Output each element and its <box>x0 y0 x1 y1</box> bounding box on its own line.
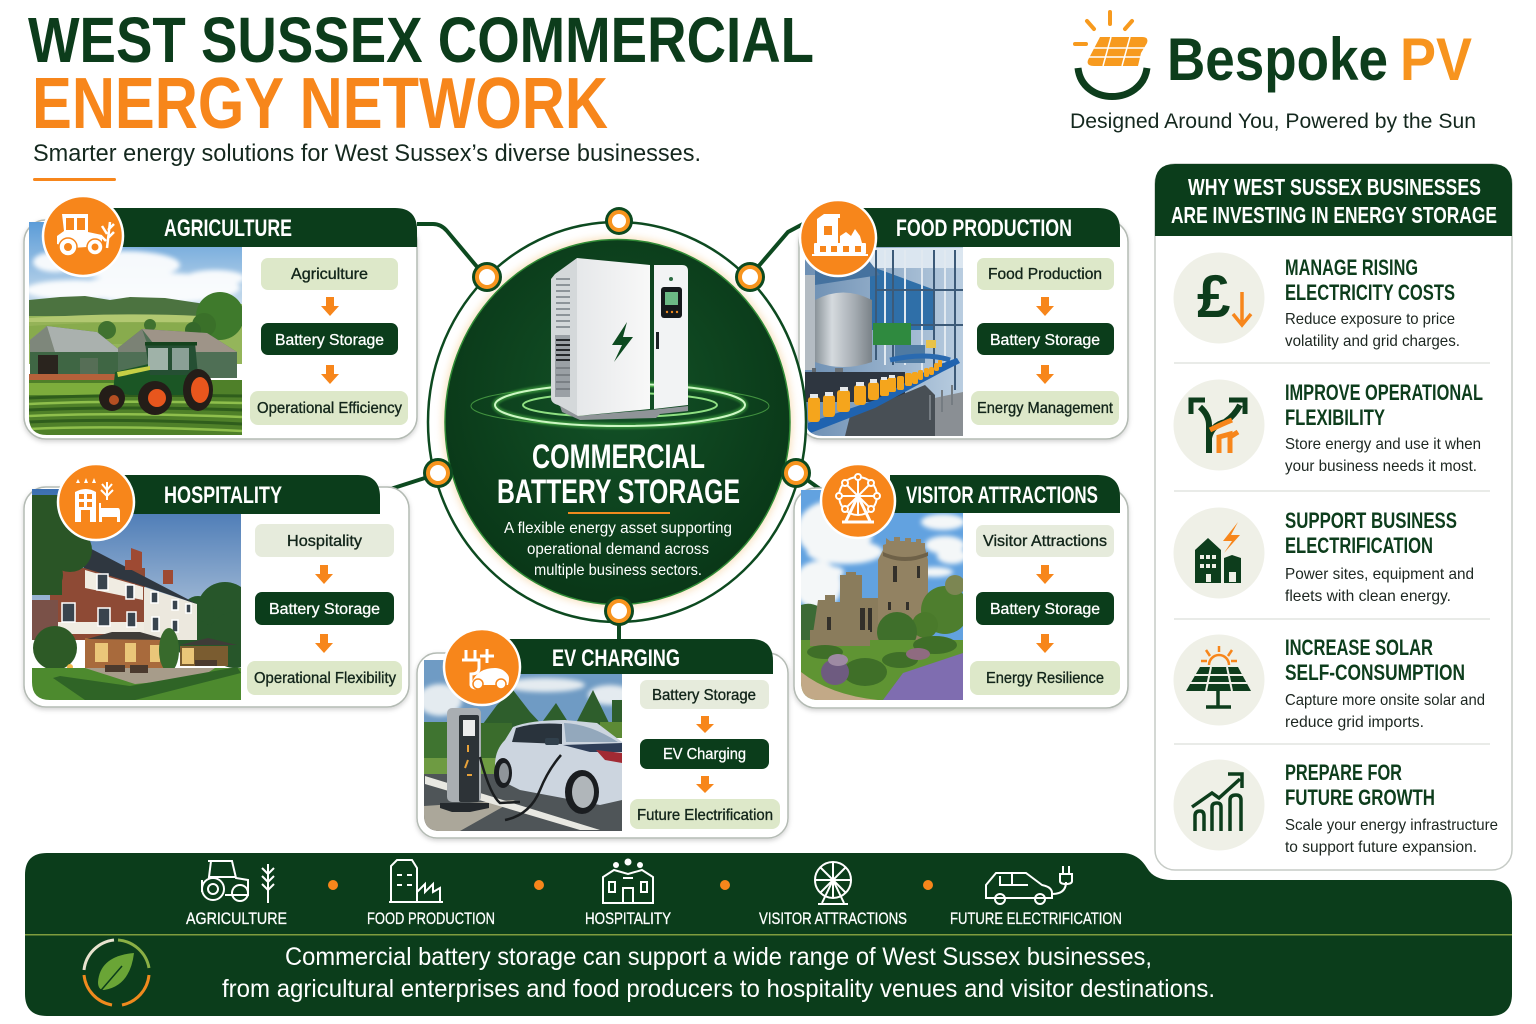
item: improve operational flexibility: your business needs it most. <box>1285 458 1477 475</box>
flow: EV charging <box>630 680 780 829</box>
heading: EV CHARGING <box>552 645 680 672</box>
flow: hospitality <box>247 524 402 695</box>
flow: hospitality: Operational Flexibility <box>254 670 396 687</box>
card <box>24 487 409 707</box>
flow: visitor attractions: Energy Resilience <box>986 670 1104 687</box>
icon: solar panel smile <box>1075 12 1147 96</box>
hub description <box>504 520 732 579</box>
hub heading: COMMERCIAL <box>532 438 705 476</box>
item: prepare for future growth <box>1174 760 1498 856</box>
card <box>417 653 788 838</box>
windows <box>62 574 191 632</box>
card <box>1155 164 1512 870</box>
item: manage rising electricity costs: ELECTRICITY COSTS <box>1285 280 1455 305</box>
sector item: visitor attractions <box>759 862 907 928</box>
title <box>28 4 814 144</box>
panel: hospitality <box>22 464 409 707</box>
cable <box>480 757 520 803</box>
energy rings <box>471 384 769 426</box>
item: prepare for future growth: Scale your energy infrastructure <box>1285 817 1498 834</box>
heading: AGRICULTURE <box>164 215 292 242</box>
sector item: visitor attractions: VISITOR ATTRACTIONS <box>759 909 907 928</box>
sector item: food production <box>367 860 495 928</box>
item: prepare for future growth: PREPARE FOR <box>1285 760 1402 785</box>
item: support business electrification <box>1174 508 1474 605</box>
hub heading: BATTERY STORAGE <box>497 473 740 511</box>
photo: EV at charger <box>418 660 632 831</box>
hub outer ring <box>428 222 806 622</box>
logo: Bespoke PV <box>1070 12 1476 133</box>
heading: VISITOR ATTRACTIONS <box>906 482 1098 509</box>
panel: food production <box>799 200 1128 439</box>
title accent rule <box>33 178 116 181</box>
icon: plug and car <box>444 629 520 705</box>
logo: Bespoke PV: Designed Around You, Powered by the Sun <box>1070 110 1476 133</box>
card <box>799 220 1128 439</box>
ground floor <box>85 638 170 668</box>
item: increase solar self-consumption: Capture more onsite solar and <box>1285 692 1485 709</box>
hub description: multiple business sectors. <box>534 562 702 579</box>
hub glow <box>442 237 792 607</box>
icon: tractor <box>43 196 123 276</box>
barns <box>30 326 118 374</box>
header bar <box>840 208 1120 247</box>
photo: hotel <box>32 489 241 700</box>
header bar <box>890 475 1120 513</box>
icon: leaf in cycle arrows <box>84 940 149 1005</box>
icon: hotel <box>58 464 134 540</box>
header bar <box>100 208 417 247</box>
sector item: agriculture: AGRICULTURE <box>186 909 287 928</box>
logo: Bespoke PV: PV <box>1400 26 1472 93</box>
flow: visitor attractions: Battery Storage <box>990 601 1100 618</box>
item: support business electrification: Power sites, equipment and <box>1285 566 1474 583</box>
flow: agriculture: Battery Storage <box>275 332 384 349</box>
right wing <box>144 587 197 640</box>
item: support business electrification: SUPPORT BUSINESS <box>1285 508 1457 533</box>
left wing <box>50 568 145 640</box>
central hub: commercial battery storage <box>423 207 811 626</box>
item: manage rising electricity costs: volatility and grid charges. <box>1285 333 1460 350</box>
hub description: operational demand across <box>527 541 709 558</box>
item: prepare for future growth: FUTURE GROWTH <box>1285 785 1435 810</box>
flow: agriculture: Operational Efficiency <box>257 400 402 417</box>
sector item: future electrification <box>950 866 1122 928</box>
item: increase solar self-consumption: INCREASE SOLAR <box>1285 635 1433 660</box>
sector item: agriculture <box>186 861 287 928</box>
footer band <box>25 853 1512 1016</box>
logo: Bespoke PV: Bespoke <box>1167 26 1388 93</box>
hub dark disc <box>445 240 790 604</box>
photo: farm and tractor <box>25 222 245 435</box>
title: ENERGY NETWORK <box>32 64 608 144</box>
flow: agriculture <box>250 258 408 425</box>
sector item: future electrification: FUTURE ELECTRIFICATION <box>950 909 1122 928</box>
header bar <box>500 639 773 674</box>
car <box>495 720 622 805</box>
header bar <box>100 475 380 514</box>
item: improve operational flexibility: Store energy and use it when <box>1285 436 1481 453</box>
sector item: hospitality: HOSPITALITY <box>585 909 671 928</box>
panel: visitor attractions <box>794 464 1128 708</box>
control screen <box>661 287 682 318</box>
heading: HOSPITALITY <box>164 482 282 509</box>
item: manage rising electricity costs: MANAGE RISING <box>1285 255 1418 280</box>
hub description: A flexible energy asset supporting <box>504 520 732 537</box>
panel: why West Sussex businesses <box>1155 164 1512 870</box>
item: support business electrification: fleets with clean energy. <box>1285 588 1451 605</box>
roof <box>84 549 196 604</box>
flow: EV charging: Future Electrification <box>637 807 773 824</box>
flow: EV charging: Battery Storage <box>652 687 756 704</box>
flow: visitor attractions: Visitor Attractions <box>983 533 1107 550</box>
item: manage rising electricity costs: £ <box>1197 263 1230 330</box>
heading: FOOD PRODUCTION <box>896 215 1072 242</box>
hub rule <box>568 512 670 514</box>
icon: factory <box>800 200 876 276</box>
item: improve operational flexibility: FLEXIBILITY <box>1285 405 1385 430</box>
battery cabinet <box>551 258 688 420</box>
hub heading <box>497 438 740 511</box>
item: increase solar self-consumption <box>1174 634 1485 731</box>
item: prepare for future growth: to support future expansion. <box>1285 839 1477 856</box>
closing statement <box>222 943 1215 1003</box>
hub connection nodes <box>423 207 811 626</box>
connector lines from hub to sector panels <box>378 224 824 642</box>
photo: bottling line <box>805 247 963 436</box>
band background <box>25 853 1512 1016</box>
closing statement: from agricultural enterprises and food producers to hospitality venues and visitor destinations. <box>222 975 1215 1003</box>
lightning bolt <box>612 322 633 362</box>
flow: EV charging: EV Charging <box>663 746 746 763</box>
icon: ferris wheel <box>821 464 895 538</box>
photo: castle and garden <box>794 490 969 700</box>
title: WEST SUSSEX COMMERCIAL <box>28 4 814 76</box>
item: increase solar self-consumption: SELF-CONSUMPTION <box>1285 660 1465 685</box>
item: support business electrification: ELECTRIFICATION <box>1285 533 1433 558</box>
header bar <box>1155 164 1512 236</box>
flow: agriculture: Agriculture <box>291 266 368 283</box>
left tree <box>32 495 92 595</box>
item: improve operational flexibility <box>1174 380 1483 475</box>
flow: food production: Battery Storage <box>990 332 1100 349</box>
sector item: hospitality <box>585 858 671 928</box>
tractor <box>114 364 188 395</box>
flow: food production: Food Production <box>988 266 1102 283</box>
flow: food production <box>971 258 1119 425</box>
flow: visitor attractions <box>970 525 1120 695</box>
flow: food production: Energy Management <box>977 400 1114 417</box>
flow: hospitality: Hospitality <box>287 533 362 550</box>
panel: EV charging <box>417 629 788 838</box>
flow: hospitality: Battery Storage <box>269 601 380 618</box>
card <box>24 220 417 439</box>
panel heading <box>1171 174 1497 228</box>
card <box>794 488 1128 708</box>
item: manage rising electricity costs <box>1174 252 1460 350</box>
sector item: food production: FOOD PRODUCTION <box>367 909 495 928</box>
panel: agriculture <box>24 196 417 439</box>
charger <box>447 708 481 802</box>
closing statement: Commercial battery storage can support a wide range of West Sussex businesses, <box>285 943 1152 971</box>
item: increase solar self-consumption: reduce grid imports. <box>1285 714 1424 731</box>
item: manage rising electricity costs: Reduce exposure to price <box>1285 311 1455 328</box>
subtitle: Smarter energy solutions for West Sussex’s diverse businesses. <box>33 140 701 167</box>
